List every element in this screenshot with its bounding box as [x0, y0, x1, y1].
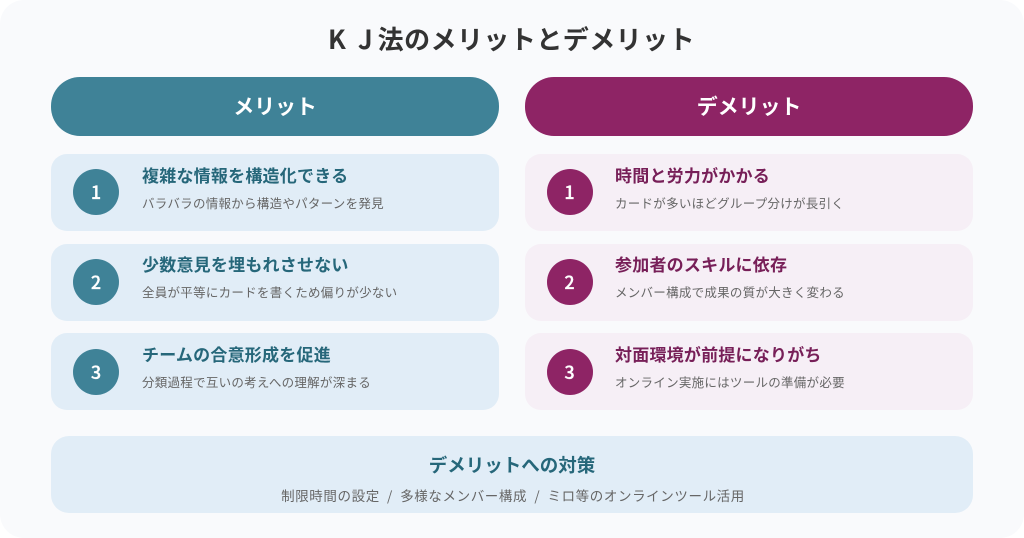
- demerit card 2: 参加者のスキルに依存: [615, 250, 787, 276]
- merit card 1: [51, 154, 499, 230]
- header: merit: メリット: [233, 91, 317, 121]
- merit card 3: [51, 333, 499, 410]
- merit card 2: 2: [91, 269, 101, 295]
- demerit card 3: [525, 333, 973, 410]
- demerit card 1: [525, 154, 973, 230]
- demerit card 2: メンバー構成で成果の質が大きく変わる: [615, 282, 845, 300]
- header: demerit: [525, 77, 973, 136]
- merit card 3: 3: [91, 358, 101, 384]
- countermeasures panel: [51, 436, 973, 512]
- merit card 1: 複雑な情報を構造化できる: [142, 162, 348, 186]
- merit card 3: チームの合意形成を促進: [142, 341, 331, 366]
- merit card 3: 分類過程で互いの考えへの理解が深まる: [142, 372, 371, 391]
- demerit card 1: カードが多いほどグループ分けが長引く: [615, 192, 844, 212]
- header: merit: [51, 77, 499, 136]
- demerit card 1: 1: [564, 179, 575, 205]
- demerit card 3: 3: [564, 358, 575, 384]
- demerit card 3: オンライン実施にはツールの準備が必要: [615, 372, 845, 391]
- countermeasures text: 制限時間の設定 / 多様なメンバー構成 / ミロ等のオンラインツール活用: [281, 484, 745, 504]
- demerit card 3: 対面環境が前提になりがち: [615, 341, 822, 366]
- header: demerit: デメリット: [697, 91, 801, 121]
- demerit card 2: 2: [564, 269, 575, 295]
- countermeasures heading: デメリットへの対策: [429, 452, 595, 478]
- merit card 2: 全員が平等にカードを書くため偏りが少ない: [142, 282, 397, 300]
- merit card 1: バラバラの情報から構造やパターンを発見: [142, 192, 384, 212]
- demerit card 2: [525, 244, 973, 320]
- merit card 2: [51, 244, 499, 320]
- title: KJ法のメリットとデメリット: [328, 20, 695, 57]
- merit card 2: 少数意見を埋もれさせない: [142, 250, 349, 276]
- demerit card 1: 時間と労力がかかる: [615, 162, 770, 186]
- merit card 1: 1: [91, 179, 101, 205]
